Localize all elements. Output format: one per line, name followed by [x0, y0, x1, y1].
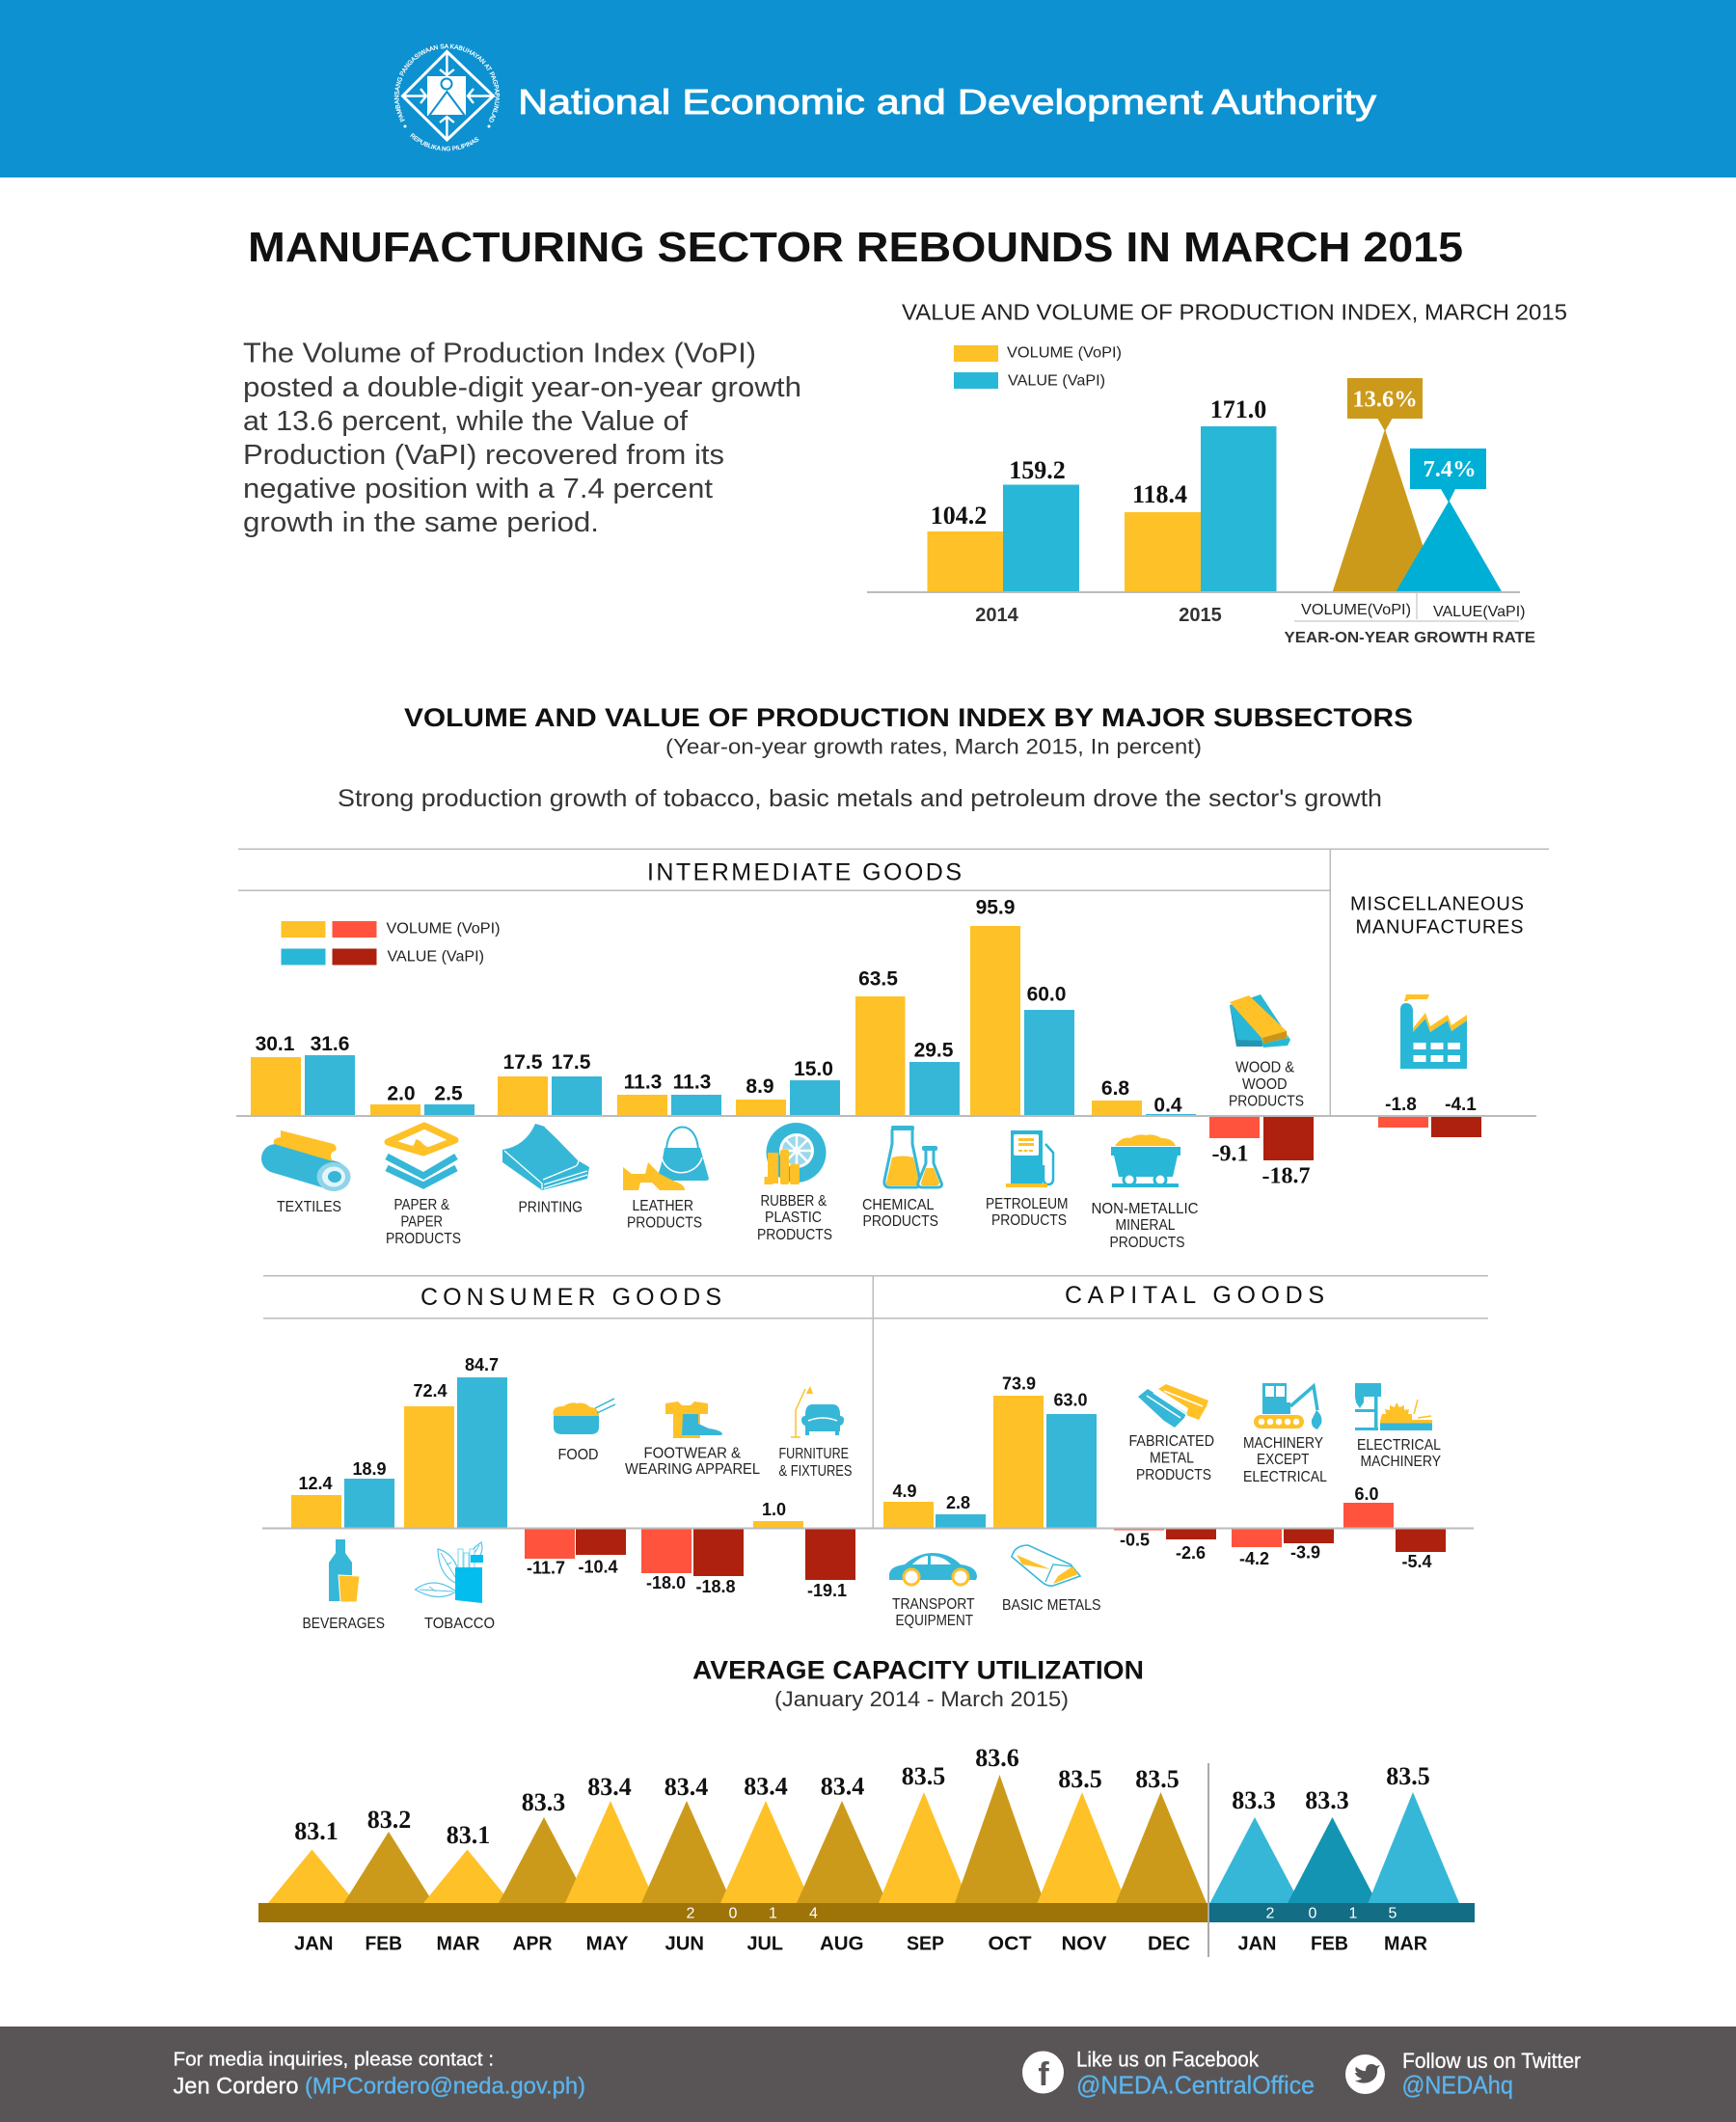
bars: wood: -18.7 [1261, 1163, 1310, 1188]
month labels: AUG [820, 1933, 864, 1954]
icon: textiles [274, 1130, 351, 1191]
bars: wood [1209, 1116, 1314, 1188]
label: non-metallic: PRODUCTS [1109, 1235, 1184, 1251]
label: transport: TRANSPORT [892, 1596, 975, 1613]
label: rubber: RUBBER & [760, 1193, 827, 1210]
bars: beverages: 12.4 [298, 1474, 333, 1493]
month labels: JAN [1238, 1933, 1277, 1954]
growth rate labels: VALUE(VaPI) [1433, 604, 1526, 620]
label: machinery [1243, 1435, 1327, 1485]
panel: value and volume chart [867, 299, 1567, 646]
media contact: For media inquiries, please contact : [174, 2049, 494, 2070]
legend [282, 920, 500, 965]
label: paper: PAPER & [393, 1197, 449, 1213]
label: fabricated [1128, 1433, 1214, 1483]
bars: beverages: 18.9 [352, 1459, 387, 1479]
icon: leather [623, 1127, 709, 1190]
bars: food [525, 1529, 626, 1578]
legend: VALUE (VaPI) [1008, 372, 1105, 390]
month labels: MAY [586, 1933, 629, 1954]
bars: textiles: 30.1 [256, 1033, 295, 1055]
bars: footwear [641, 1529, 744, 1596]
icon: fabricated metal [1138, 1384, 1208, 1428]
heading: MISCELLANEOUS [1350, 893, 1524, 914]
bars: footwear: -18.0 [646, 1573, 686, 1592]
bar chart: 2015: 2015 [1179, 605, 1222, 626]
label: printing: PRINTING [519, 1200, 583, 1215]
icon: twitter [1345, 2054, 1385, 2094]
legend: VOLUME (VoPI) [1007, 345, 1122, 361]
bars: non-metallic [1092, 1077, 1196, 1117]
bars: furniture: -19.1 [807, 1581, 847, 1600]
bar chart: 2014: 2014 [975, 605, 1019, 626]
bars: printing [498, 1051, 602, 1115]
label: leather: LEATHER [633, 1198, 693, 1214]
text block: summary paragraph [243, 338, 801, 538]
utilization values: 83.5 [1058, 1765, 1102, 1793]
bars: food: -10.4 [578, 1557, 618, 1576]
bars: basic metals: 63.0 [1053, 1391, 1088, 1410]
bar chart: 2014: 159.2 [1009, 456, 1066, 484]
bars: textiles [251, 1033, 355, 1115]
icon: NEDA logo: REPUBLIKA NG PILIPINAS [410, 133, 478, 150]
label: furniture: FURNITURE [779, 1446, 849, 1462]
chart heading: VALUE AND VOLUME OF PRODUCTION INDEX, MARCH 2015 [902, 299, 1567, 324]
month labels: MAR [436, 1933, 480, 1954]
bars: transport: 4.9 [892, 1482, 917, 1501]
month labels [294, 1933, 1428, 1954]
subsectors heading [338, 703, 1413, 812]
bars: leather: 11.3 [624, 1071, 662, 1094]
utilization values: 83.4 [821, 1773, 864, 1800]
month labels: OCT [988, 1933, 1032, 1954]
icon: car [889, 1553, 977, 1585]
label: electrical: MACHINERY [1360, 1454, 1441, 1470]
footer [0, 2027, 1736, 2122]
bars: machinery [1232, 1529, 1334, 1568]
month labels: FEB [1311, 1933, 1348, 1954]
icon: wood [1230, 994, 1290, 1047]
bars: rubber: 8.9 [746, 1075, 774, 1098]
utilization values [294, 1744, 1430, 1849]
twitter text: Follow us on Twitter [1402, 2049, 1581, 2073]
utilization values: 83.5 [902, 1762, 945, 1790]
bars: electrical: -5.4 [1401, 1552, 1432, 1571]
bars: rubber [736, 1058, 840, 1115]
icon: food [553, 1399, 615, 1434]
icon: bottle [329, 1539, 360, 1602]
facebook text: @NEDA.CentralOffice [1076, 2070, 1315, 2099]
icon: electrical machinery [1355, 1383, 1432, 1430]
year bar 2015 [1208, 1903, 1475, 1922]
bars: leather [617, 1071, 721, 1115]
month labels: FEB [365, 1933, 402, 1954]
legend [954, 345, 1122, 390]
text block: summary paragraph: at 13.6 percent, while the Value of [243, 406, 689, 437]
label: apparel [625, 1445, 760, 1478]
icon: basic metals [1012, 1545, 1080, 1586]
growth rate labels: YEAR-ON-YEAR GROWTH RATE [1285, 630, 1535, 646]
icon: printing [502, 1124, 589, 1190]
label: machinery: ELECTRICAL [1243, 1469, 1327, 1485]
bar chart: 2014 [928, 456, 1079, 626]
month labels: DEC [1148, 1933, 1190, 1954]
heading: CONSUMER GOODS [420, 1284, 721, 1311]
utilization values: 83.4 [744, 1773, 788, 1800]
twitter text: @NEDAhq [1402, 2070, 1513, 2099]
chart: capacity utilization [258, 1744, 1475, 1957]
bars: furniture: 1.0 [762, 1500, 786, 1519]
panel: capital goods [883, 1282, 1446, 1629]
icon: tobacco [415, 1542, 483, 1603]
icon: factory [1400, 994, 1467, 1069]
month labels: APR [513, 1933, 553, 1954]
label: electrical: ELECTRICAL [1357, 1437, 1441, 1454]
title: MANUFACTURING SECTOR REBOUNDS IN MARCH 2015 [248, 224, 1463, 271]
utilization values: 83.5 [1135, 1765, 1180, 1793]
bars: paper: 2.0 [387, 1082, 416, 1105]
subsectors heading: Strong production growth of tobacco, basic metals and petroleum drove the sector's growth [338, 785, 1382, 812]
utilization values: 83.4 [587, 1773, 632, 1801]
bars: transport: 2.8 [946, 1493, 970, 1512]
icon: facebook [1022, 2051, 1064, 2093]
label: machinery: MACHINERY [1243, 1435, 1323, 1452]
bars: miscellaneous: -1.8 [1385, 1095, 1417, 1115]
bars: basic metals: 73.9 [1002, 1374, 1036, 1393]
bars: machinery: -3.9 [1290, 1543, 1320, 1563]
bars: non-metallic: 6.8 [1101, 1077, 1129, 1100]
label: basic metals: BASIC METALS [1002, 1597, 1101, 1614]
twitter text [1402, 2049, 1581, 2099]
label: wood: WOOD [1242, 1076, 1287, 1093]
bars: fabricated: -0.5 [1120, 1530, 1150, 1549]
label: paper: PRODUCTS [386, 1231, 461, 1247]
header title: National Economic and Development Authority [518, 82, 1376, 122]
media contact: (MPCordero@neda.gov.ph) [305, 2074, 585, 2099]
bars: electrical [1343, 1484, 1446, 1571]
heading [1350, 893, 1524, 938]
label: chemical: CHEMICAL [862, 1197, 935, 1213]
heading: MANUFACTURES [1356, 916, 1524, 938]
icon: chemical [884, 1126, 941, 1187]
label: chemical: PRODUCTS [862, 1213, 938, 1230]
bar chart: 2015: 171.0 [1210, 395, 1266, 423]
year bar 2014: 0 [729, 1906, 738, 1921]
label: fabricated: FABRICATED [1128, 1433, 1214, 1450]
month labels: JAN [294, 1933, 334, 1954]
label: paper [386, 1197, 461, 1247]
utilization values: 83.4 [665, 1773, 708, 1801]
year bar 2015: 2 [1266, 1906, 1275, 1921]
label: transport: EQUIPMENT [895, 1613, 973, 1629]
bar chart: 2015: 118.4 [1132, 480, 1187, 508]
bars: tobacco: 84.7 [465, 1355, 499, 1374]
label: non-metallic: MINERAL [1115, 1217, 1176, 1234]
year bar 2015: 0 [1309, 1906, 1317, 1921]
icon: petroleum [1006, 1130, 1053, 1187]
month labels: SEP [907, 1933, 944, 1954]
utilization values: 83.1 [447, 1821, 490, 1849]
media contact: Jen Cordero [174, 2074, 299, 2099]
capacity utilization heading: (January 2014 - March 2015) [774, 1687, 1069, 1711]
label: rubber [757, 1193, 832, 1243]
facebook text: Like us on Facebook [1076, 2047, 1260, 2072]
text block: summary paragraph: posted a double-digit year-on-year growth [243, 372, 801, 403]
label: furniture: & FIXTURES [779, 1463, 853, 1480]
bars: basic metals [993, 1374, 1097, 1528]
bars: leather: 11.3 [673, 1071, 711, 1094]
label: tobacco: TOBACCO [424, 1616, 495, 1632]
triangle: volume growth [1333, 378, 1438, 592]
label: textiles: TEXTILES [277, 1199, 341, 1215]
icon: furniture [791, 1386, 844, 1437]
label: furniture [779, 1446, 853, 1480]
label: petroleum: PETROLEUM [986, 1196, 1069, 1212]
bars: wood: -9.1 [1211, 1142, 1248, 1167]
label: rubber: PLASTIC [765, 1210, 822, 1226]
growth rate labels [1285, 602, 1535, 646]
label: machinery: EXCEPT [1257, 1452, 1310, 1468]
icon: NEDA logo: PAMBANSANG PANGASIWAAN SA KABUHAYAN AT PAGPAPAUNLAD [393, 44, 500, 122]
utilization values: 83.6 [975, 1744, 1019, 1772]
triangle: value growth: 7.4% [1423, 456, 1477, 482]
bars: fabricated [1114, 1529, 1216, 1563]
bars: machinery: -4.2 [1239, 1549, 1269, 1568]
utilization values: 83.3 [1232, 1786, 1276, 1814]
label: leather: PRODUCTS [627, 1215, 702, 1231]
label: electrical [1357, 1437, 1441, 1470]
triangle: value growth [1396, 449, 1503, 592]
label: paper: PAPER [401, 1213, 443, 1231]
bars: transport [883, 1482, 986, 1528]
bars: footwear: -18.8 [695, 1577, 736, 1596]
label: wood: WOOD & [1235, 1059, 1294, 1076]
month labels: JUL [746, 1933, 783, 1954]
legend: VOLUME (VoPI) [386, 920, 500, 938]
bars: miscellaneous [1378, 1095, 1481, 1137]
heading: CAPITAL GOODS [1065, 1282, 1324, 1309]
media contact [174, 2049, 585, 2099]
utilization values: 83.3 [1305, 1786, 1349, 1814]
label: beverages: BEVERAGES [303, 1616, 385, 1632]
panel: intermediate goods [236, 858, 1536, 1251]
year bar 2014: 4 [809, 1906, 818, 1921]
year bar 2015: 5 [1389, 1906, 1397, 1921]
utilization values: 83.1 [294, 1817, 339, 1845]
triangles 2014 [268, 1775, 1207, 1903]
bars: rubber: 15.0 [794, 1058, 833, 1080]
bars: tobacco: 72.4 [413, 1381, 448, 1401]
bars: furniture [753, 1500, 855, 1600]
label: transport [892, 1596, 975, 1629]
subsectors heading: (Year-on-year growth rates, March 2015, In percent) [665, 735, 1202, 758]
facebook text [1076, 2047, 1315, 2099]
label: apparel: FOOTWEAR & [644, 1445, 741, 1462]
bars: electrical: 6.0 [1354, 1484, 1379, 1504]
text block: summary paragraph: negative position with a 7.4 percent [243, 474, 713, 504]
bars: beverages [291, 1459, 394, 1528]
label: wood: PRODUCTS [1229, 1094, 1304, 1109]
utilization values: 83.2 [367, 1806, 411, 1834]
panel: miscellaneous manufactures [1350, 893, 1524, 1137]
year bar 2014: 2 [687, 1906, 695, 1921]
icon: facebook: f [1038, 2056, 1049, 2093]
label: fabricated: METAL [1150, 1451, 1194, 1466]
capacity utilization heading [692, 1655, 1144, 1711]
capacity utilization heading: AVERAGE CAPACITY UTILIZATION [692, 1655, 1144, 1684]
label: food: FOOD [557, 1447, 598, 1463]
bars: petroleum [970, 897, 1074, 1115]
text block: summary paragraph: The Volume of Production Index (VoPI) [243, 338, 756, 368]
label: non-metallic [1092, 1201, 1198, 1251]
text block: summary paragraph: Production (VaPI) recovered from its [243, 440, 724, 471]
growth rate labels: VOLUME(VoPI) [1301, 602, 1411, 618]
bar chart: 2015 [1125, 395, 1277, 626]
month labels: JUN [665, 1933, 704, 1954]
year bar 2015: 1 [1349, 1906, 1358, 1921]
bars: miscellaneous: -4.1 [1445, 1095, 1477, 1115]
label: fabricated: PRODUCTS [1136, 1467, 1211, 1483]
label: petroleum: PRODUCTS [991, 1212, 1067, 1229]
icon: apparel [665, 1401, 722, 1438]
bars: printing: 17.5 [552, 1051, 591, 1074]
month labels: MAR [1384, 1933, 1428, 1954]
label: rubber: PRODUCTS [757, 1227, 832, 1243]
utilization values: 83.5 [1386, 1762, 1430, 1790]
utilization values: 83.3 [522, 1788, 565, 1816]
label: non-metallic: NON-METALLIC [1092, 1201, 1198, 1217]
icon: paper [387, 1126, 456, 1185]
bars: petroleum: 60.0 [1027, 984, 1066, 1005]
legend: VALUE (VaPI) [388, 949, 484, 965]
bars: tobacco [404, 1355, 507, 1528]
bars: food: -11.7 [527, 1559, 565, 1578]
icon: cart [1111, 1134, 1180, 1187]
label: petroleum [986, 1196, 1069, 1229]
bars: petroleum: 95.9 [976, 897, 1015, 918]
year bar 2014: 1 [769, 1906, 777, 1921]
bar chart: 2014: 104.2 [931, 502, 987, 530]
bars: chemical: 63.5 [858, 968, 898, 990]
triangles 2015 [1209, 1792, 1459, 1903]
bars: printing: 17.5 [503, 1051, 543, 1074]
bars: paper: 2.5 [434, 1082, 463, 1105]
label: apparel: WEARING APPAREL [625, 1461, 760, 1478]
bars: paper [370, 1082, 475, 1115]
bars: fabricated: -2.6 [1176, 1543, 1206, 1563]
bars: textiles: 31.6 [311, 1033, 349, 1055]
header band [0, 0, 1736, 177]
label: wood [1229, 1059, 1304, 1109]
text block: summary paragraph: growth in the same period. [243, 507, 599, 538]
label: chemical [862, 1197, 938, 1230]
triangle: volume growth: 13.6% [1352, 386, 1418, 413]
icon: excavator [1254, 1383, 1321, 1429]
bars: chemical: 29.5 [914, 1040, 954, 1061]
year bar 2014 [258, 1903, 1208, 1922]
month labels: NOV [1061, 1933, 1107, 1954]
icon: rubber [764, 1123, 826, 1184]
label: leather [627, 1198, 702, 1231]
heading: INTERMEDIATE GOODS [647, 858, 962, 885]
bars: non-metallic: 0.4 [1153, 1094, 1182, 1117]
subsectors heading: VOLUME AND VALUE OF PRODUCTION INDEX BY MAJOR SUBSECTORS [404, 703, 1413, 732]
panel: consumer goods [291, 1284, 855, 1632]
bars: chemical [855, 968, 960, 1115]
